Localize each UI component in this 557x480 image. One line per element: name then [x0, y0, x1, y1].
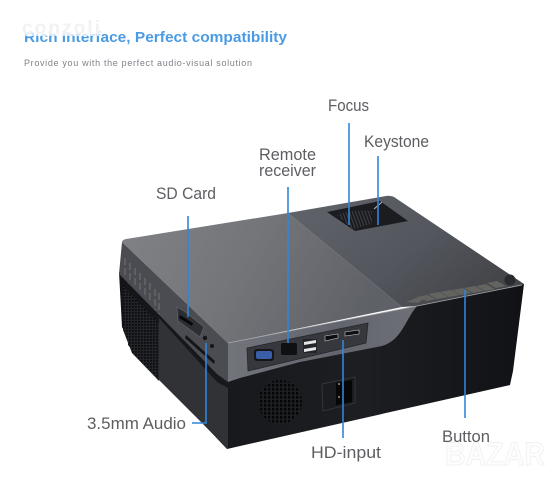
speaker grille: [258, 380, 302, 424]
title: Rich interface, Perfect compatibility: [24, 29, 288, 46]
label: HD-input: HD-input: [311, 443, 381, 462]
top surface left: [122, 213, 402, 343]
front edge highlight: [228, 285, 522, 343]
grey side of lid: [119, 242, 228, 382]
HDMI ports: [325, 330, 359, 341]
top surface right: [288, 196, 524, 307]
button strip: [406, 281, 506, 303]
watermark: conzoli: conzoli: [22, 18, 100, 39]
side slits: [125, 258, 159, 314]
label: Keystone: Keystone: [364, 132, 429, 151]
subtitle: Provide you with the perfect audio-visual solution: [24, 58, 252, 68]
USB ports: [303, 339, 317, 353]
grey front panel: [228, 306, 417, 382]
audio slit and jacks: [185, 335, 215, 364]
power socket: [322, 377, 355, 411]
side vent grid: [123, 286, 159, 381]
label: Focus: Focus: [328, 96, 369, 115]
SD card slot: [177, 307, 204, 337]
label: Remote receiver: Remote: [259, 145, 316, 164]
port panel: [247, 323, 368, 371]
label: Button: Button: [442, 427, 490, 446]
keystone mark: [374, 202, 382, 209]
remote receiver window: [281, 343, 297, 355]
label: Remote receiver: [259, 145, 316, 180]
label: Remote receiver: receiver: [259, 161, 316, 180]
projector black lower body: [119, 272, 524, 449]
projector: [119, 196, 524, 449]
callout lines: [188, 123, 465, 438]
label: 3.5mm Audio: 3.5mm Audio: [87, 414, 186, 433]
lens recess: [327, 201, 408, 231]
focus wheel: [337, 210, 372, 229]
watermark: BAZAR: BAZAR: [445, 436, 545, 472]
VGA port: [254, 349, 274, 361]
left dark side panel: [159, 318, 228, 449]
label: SD Card: SD Card: [156, 184, 216, 203]
power dot: [504, 274, 516, 286]
